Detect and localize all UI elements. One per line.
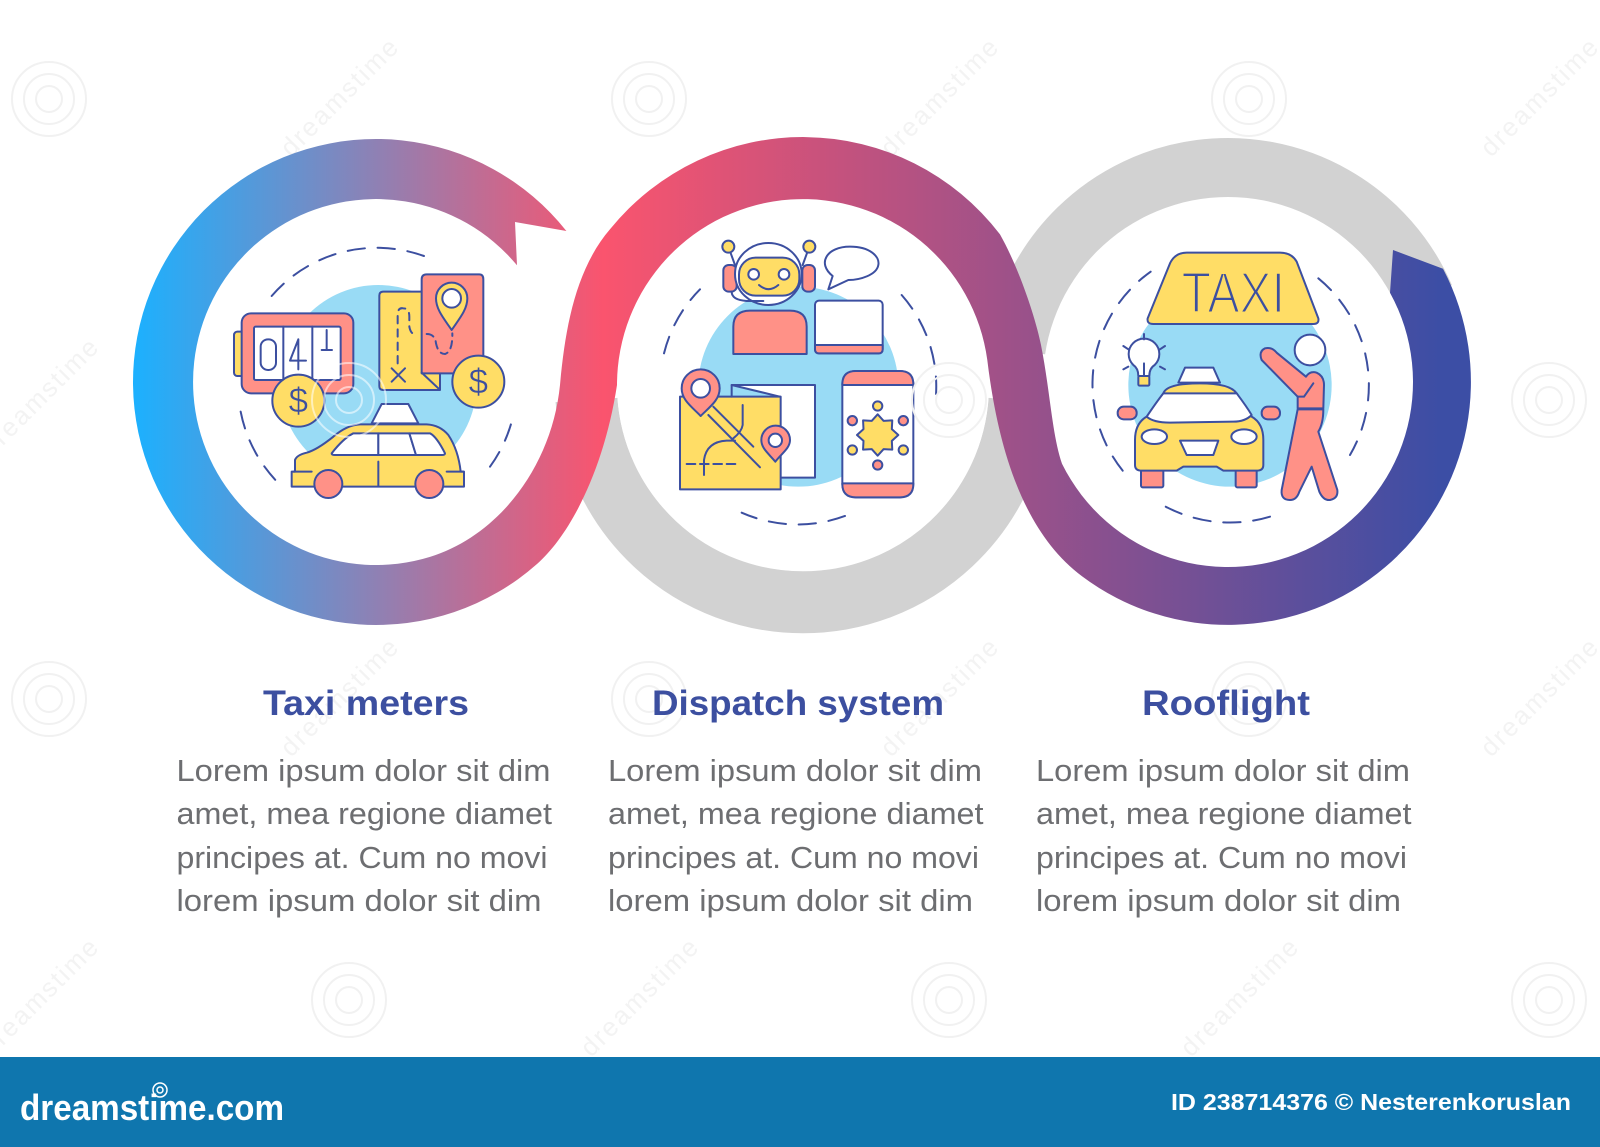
icon background circle xyxy=(698,287,898,487)
dashed ring xyxy=(664,289,936,524)
folded map with pins xyxy=(680,369,815,489)
body text xyxy=(1036,753,1412,918)
person hailing xyxy=(1261,335,1337,500)
body text: Lorem ipsum dolor sit dim xyxy=(176,753,550,788)
column: Dispatch system xyxy=(608,684,984,918)
coin right: $ xyxy=(469,363,488,402)
laptop xyxy=(815,301,883,353)
body text: amet, mea regione diamet xyxy=(176,796,552,831)
body text: principes at. Cum no movi xyxy=(1036,840,1407,875)
body text: lorem ipsum dolor sit dim xyxy=(608,883,973,918)
watermark pattern: dreamstime xyxy=(274,31,405,162)
body text: lorem ipsum dolor sit dim xyxy=(1036,883,1401,918)
heading: Dispatch system xyxy=(652,684,944,723)
watermark pattern: dreamstime xyxy=(574,931,705,1062)
body text: amet, mea regione diamet xyxy=(1036,796,1412,831)
icon: logo spiral xyxy=(153,1083,167,1097)
icon: taxi meters xyxy=(234,248,513,498)
body text: lorem ipsum dolor sit dim xyxy=(176,883,542,918)
taxi car front view xyxy=(1118,368,1280,487)
taxi roof sign: TAXI xyxy=(1182,261,1285,325)
footer bar xyxy=(0,1057,1600,1147)
watermark pattern: dreamstime xyxy=(274,631,405,762)
robot operator xyxy=(722,241,815,354)
icon: rooflight xyxy=(1092,253,1369,523)
column: Rooflight xyxy=(1036,684,1412,918)
inner disc: second ring xyxy=(617,199,989,571)
body text: principes at. Cum no movi xyxy=(608,840,979,875)
speech bubble xyxy=(825,247,879,289)
smartphone xyxy=(842,371,913,497)
coin left: $ xyxy=(289,382,308,421)
column: Taxi meters xyxy=(176,684,552,918)
image id credit: ID 238714376 © Nesterenkoruslan xyxy=(1171,1089,1571,1115)
body text: amet, mea regione diamet xyxy=(608,796,984,831)
icon background circle xyxy=(1128,283,1332,487)
grey ribbon: third ring upper half xyxy=(1016,168,1424,350)
light bulb xyxy=(1123,334,1165,386)
grey ribbon: second ring lower half xyxy=(586,400,1020,602)
gradient ribbon arrow xyxy=(133,137,1471,625)
heading: Rooflight xyxy=(1142,684,1310,723)
watermark pattern: dreamstime xyxy=(1174,931,1305,1062)
heading: Taxi meters xyxy=(263,684,469,723)
dashed ring xyxy=(1092,272,1369,523)
taxi roof sign xyxy=(1148,253,1318,325)
body text: Lorem ipsum dolor sit dim xyxy=(1036,753,1410,788)
route papers xyxy=(379,274,483,390)
inner disc: third ring xyxy=(1043,197,1413,567)
watermark pattern: dreamstime xyxy=(874,631,1005,762)
icon background circle xyxy=(280,285,477,482)
meter device xyxy=(234,313,353,393)
body text xyxy=(608,753,984,918)
coin left xyxy=(272,375,324,427)
coin right xyxy=(452,356,504,408)
body text: Lorem ipsum dolor sit dim xyxy=(608,753,982,788)
dashed ring xyxy=(241,248,513,484)
icon: dispatch system xyxy=(664,241,936,524)
taxi car side view xyxy=(292,404,464,498)
spiral watermark over art xyxy=(312,363,986,437)
footer logo text: dreamstime.com xyxy=(20,1087,284,1128)
body text xyxy=(176,753,552,918)
watermark pattern: dreamstime xyxy=(874,31,1005,162)
body text: principes at. Cum no movi xyxy=(176,840,548,875)
